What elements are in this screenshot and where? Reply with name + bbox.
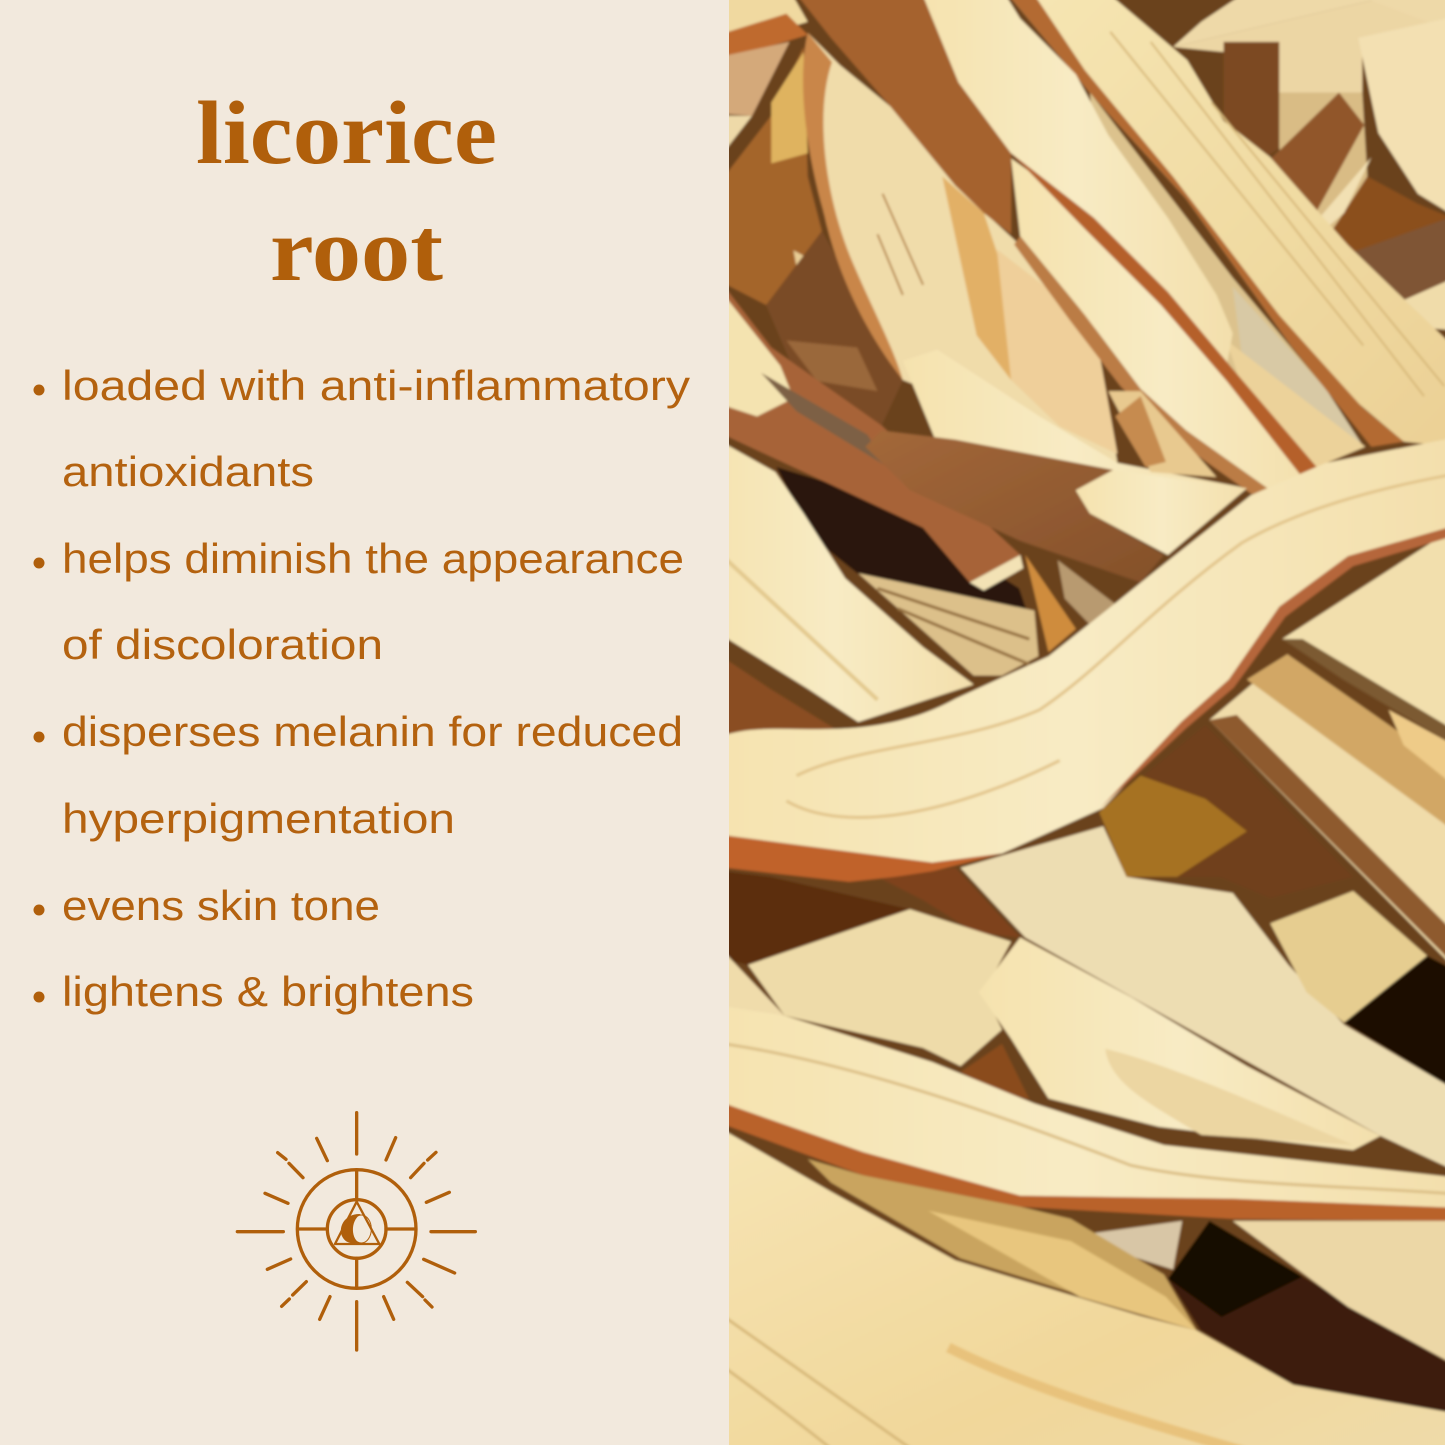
dark gap and bottom right slab	[1094, 1221, 1445, 1413]
dark gaps and lower bark	[695, 868, 1445, 1089]
strip: pale slab behind twist	[903, 350, 1242, 518]
strip: cream flap	[979, 938, 1380, 1150]
strip: small middle pieces	[695, 555, 1117, 735]
title	[196, 84, 497, 300]
strip: far right cut slab	[997, 0, 1445, 447]
strip: long bottom band	[695, 1003, 1445, 1221]
strip: tall wood slab with orange rim	[803, 33, 1117, 463]
strip: bottom slab	[695, 1120, 1445, 1445]
bullet: diminish discoloration: helps diminish the appearance	[62, 535, 684, 582]
bullet: anti-inflammatory antioxidants	[34, 362, 690, 495]
dark gap under bark	[776, 467, 1029, 619]
bullet: disperses melanin: disperses melanin for reduced	[62, 708, 683, 755]
fill behind slabs	[1090, 93, 1363, 477]
small bark chip	[960, 1044, 1029, 1099]
bullet: diminish discoloration: of discoloration	[62, 621, 383, 668]
panel: text column	[34, 84, 690, 1352]
title: licorice	[196, 84, 497, 183]
title: root	[270, 201, 443, 300]
lump: dark bark root	[1099, 725, 1353, 898]
bullet: evens skin tone: evens skin tone	[62, 882, 380, 929]
back layer: top right pieces	[1108, 0, 1445, 330]
strip: lower tan wood	[695, 826, 1445, 1170]
bullet list	[34, 362, 690, 1015]
strip: left diagonal bark	[695, 265, 1023, 590]
back layer: top left pieces	[695, 0, 903, 425]
strip: right slab behind curve	[1209, 528, 1445, 968]
bullet: anti-inflammatory antioxidants: loaded with anti-inflammatory	[62, 362, 690, 409]
bullet: lightens and brightens: lightens & brightens	[62, 968, 474, 1015]
bullet: disperses melanin: hyperpigmentation	[62, 795, 455, 842]
bullet: diminish discoloration	[34, 535, 684, 668]
icon: sun emblem	[237, 1113, 475, 1350]
bullet: anti-inflammatory antioxidants: antioxidants	[62, 448, 314, 495]
strip: left cream slab	[695, 426, 974, 722]
strip: central bark and cream slab	[786, 0, 1365, 494]
strip: large S curve	[695, 438, 1445, 882]
bullet: disperses melanin	[34, 708, 683, 842]
panel: licorice root photo	[729, 0, 1445, 1445]
strip: bark twist with cream end	[865, 431, 1247, 582]
